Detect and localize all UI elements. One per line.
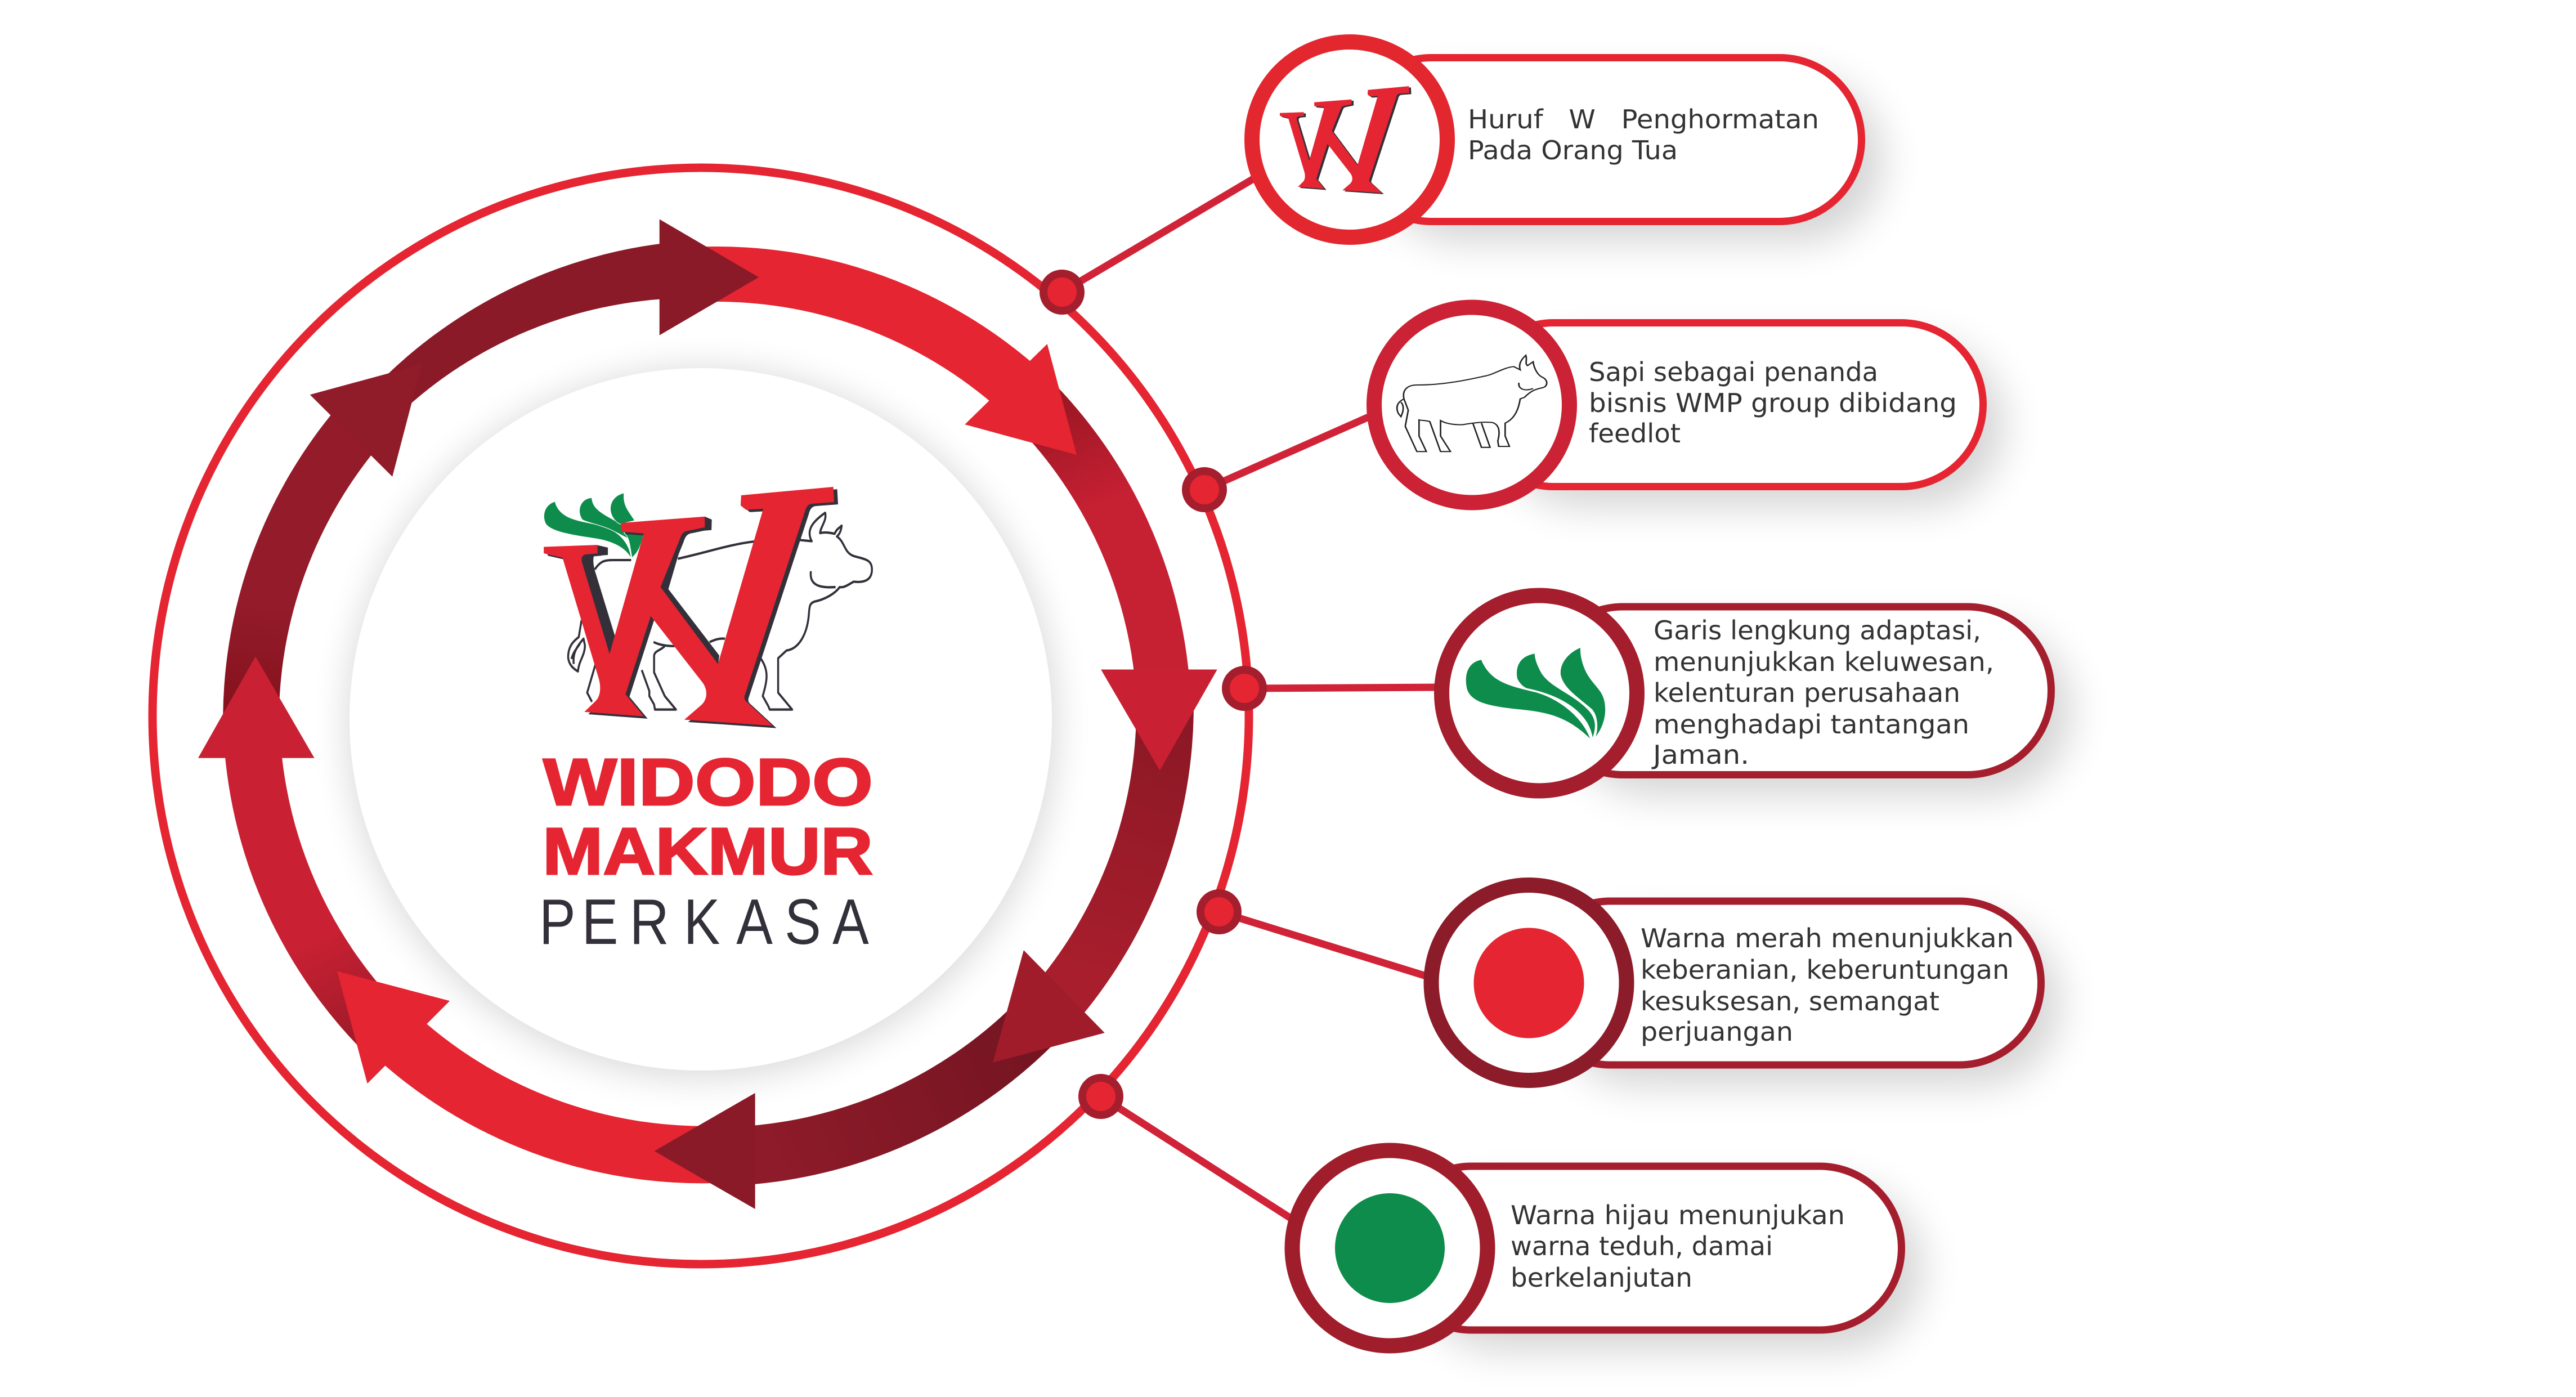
icon: W shadow xyxy=(548,489,838,728)
WIDODO: WIDODO xyxy=(543,745,873,820)
icon: W letter mark xyxy=(544,487,834,726)
arrow heads xyxy=(198,220,1217,1209)
text: cow: feedlot xyxy=(1589,418,1681,449)
text: green colour xyxy=(1511,1200,1845,1293)
text: curved lines: Jaman. xyxy=(1651,740,1749,770)
text: curved lines: menunjukkan keluwesan, xyxy=(1654,647,1994,677)
outer ring xyxy=(153,168,1249,1264)
circular arrows xyxy=(198,220,1217,1209)
text: curved lines: menghadapi tantangan xyxy=(1654,709,1969,740)
panel: red colour xyxy=(1431,885,2060,1085)
green leaves xyxy=(1466,647,1606,741)
green dot xyxy=(1335,1193,1445,1303)
text: curved lines: kelenturan perusahaan xyxy=(1654,678,1960,708)
icon circle: red dot xyxy=(1431,885,1627,1081)
text: cow: bisnis WMP group dibidang xyxy=(1589,388,1957,418)
company name xyxy=(539,745,873,958)
text: cow xyxy=(1589,357,1957,449)
central white disc xyxy=(347,368,1056,1078)
logo emblem xyxy=(544,487,872,728)
text: red colour: keberanian, keberuntungan xyxy=(1641,955,2009,985)
icon circle: leaves xyxy=(1442,595,1637,791)
icon: green leaves xyxy=(544,493,644,558)
text: green colour: warna teduh, damai xyxy=(1511,1231,1773,1261)
text: green colour: Warna hijau menunjukan xyxy=(1511,1200,1845,1230)
panel: letter W xyxy=(1252,42,1883,241)
text: cow: Sapi sebagai penanda xyxy=(1589,357,1878,387)
MAKMUR: MAKMUR xyxy=(543,814,873,889)
PERKASA: PERKASA xyxy=(539,886,869,958)
icon circle: cow xyxy=(1374,307,1569,503)
text: red colour: kesuksesan, semangat xyxy=(1641,986,1939,1017)
arrow bodies xyxy=(223,241,1194,1186)
text: red colour: perjuangan xyxy=(1641,1017,1793,1047)
text: red colour xyxy=(1641,923,2014,1047)
connector lines xyxy=(1062,174,1441,1224)
panel: curved lines xyxy=(1442,595,2071,795)
cow outline xyxy=(1397,355,1547,451)
icon circle: W xyxy=(1252,42,1448,238)
panel: cow xyxy=(1374,307,2004,507)
text: curved lines: Garis lengkung adaptasi, xyxy=(1654,615,1981,646)
icon: cow outline xyxy=(568,513,872,710)
text: red colour: Warna merah menunjukkan xyxy=(1641,923,2014,953)
small W mark xyxy=(1280,86,1412,194)
text: letter W: Pada Orang Tua xyxy=(1468,135,1678,165)
red dot xyxy=(1473,928,1584,1038)
text: green colour: berkelanjutan xyxy=(1511,1262,1692,1293)
ring nodes xyxy=(1043,274,1263,1115)
text: letter W: Huruf W Penghormatan xyxy=(1468,104,1819,135)
text: curved lines xyxy=(1651,615,1994,770)
panel: green colour xyxy=(1292,1150,1922,1350)
icon circle: green dot xyxy=(1292,1150,1488,1346)
text: letter W xyxy=(1468,104,1819,165)
